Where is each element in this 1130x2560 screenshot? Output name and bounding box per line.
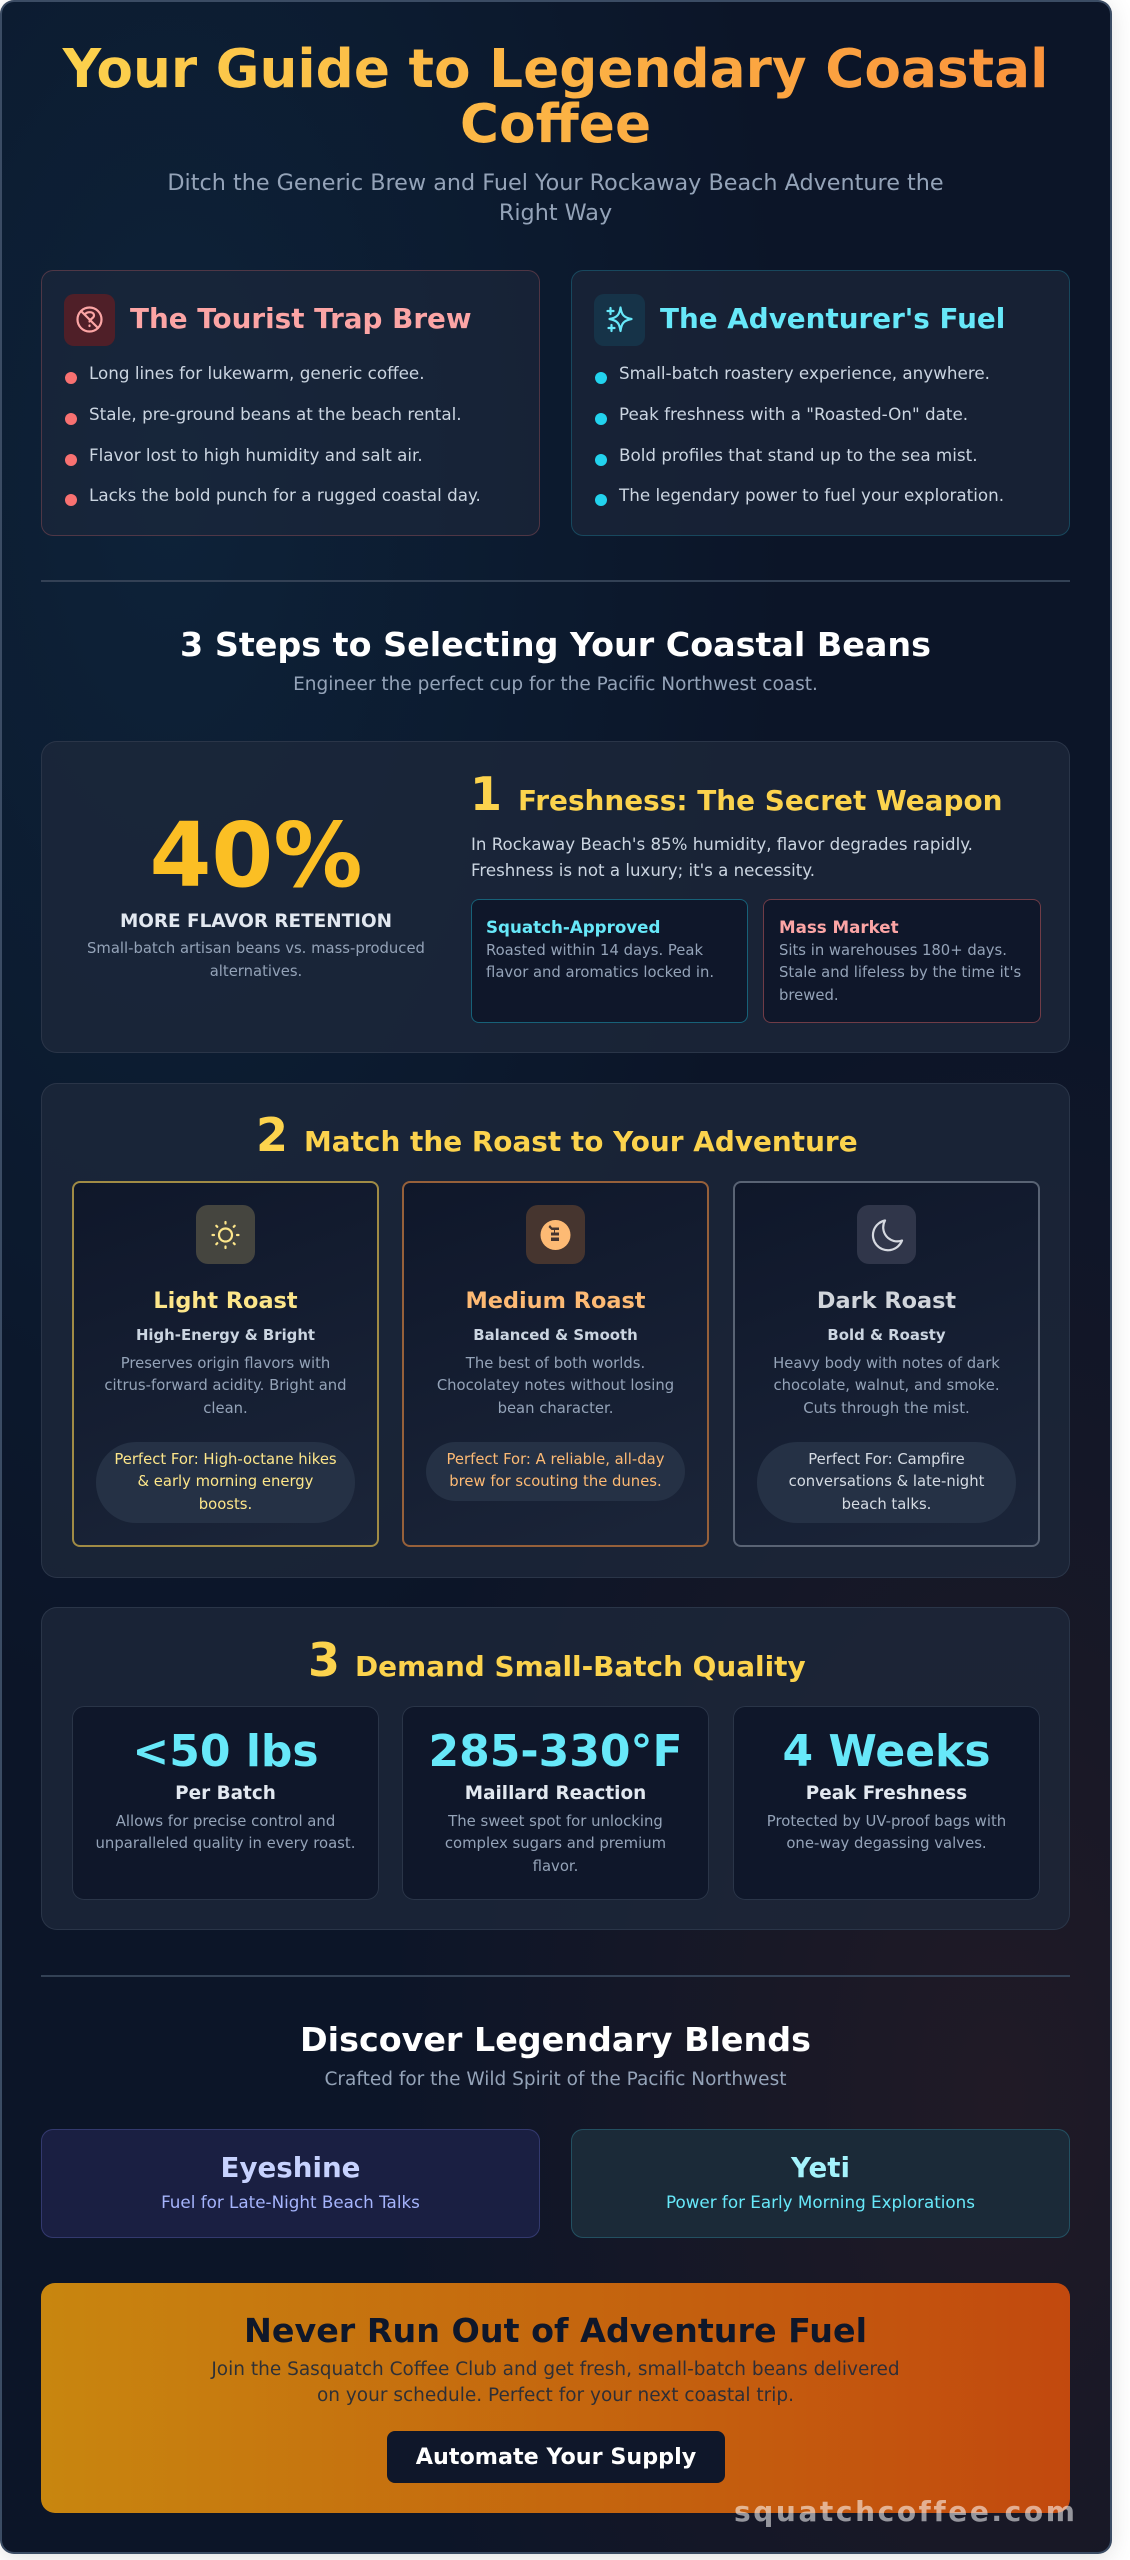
- description: Protected by UV-proof bags with: [767, 1812, 1006, 1830]
- heading: legendary blends: Discover Legendary Blends: [300, 2020, 811, 2059]
- list: tourist trap problems: Lacks the bold punch for a rugged coastal day.: [89, 485, 481, 505]
- icon: medium roast bean: [526, 1205, 585, 1264]
- roast profile: Bold & Roasty: [827, 1326, 946, 1344]
- step 1 text: Freshness is not a luxury; it's a necessity.: [471, 860, 815, 880]
- roast name: Medium Roast: [466, 1288, 646, 1314]
- roast description: Preserves origin flavors with: [121, 1355, 330, 1372]
- pill: perfect for: Perfect For: A reliable, all-day: [447, 1451, 664, 1468]
- list: adventurer benefits: [595, 363, 1004, 506]
- pill: perfect for: beach talks.: [842, 1496, 931, 1513]
- step 1 heading: Freshness: The Secret Weapon: [518, 784, 1002, 816]
- card: mass market: [763, 899, 1041, 1023]
- blend name: Yeti: [791, 2151, 850, 2184]
- roast description: chocolate, walnut, and smoke.: [773, 1377, 1000, 1394]
- stat: 40 percent: [87, 803, 425, 980]
- icon: no coffee: [64, 294, 115, 346]
- roast description: [773, 1355, 1000, 1417]
- stat card: batch size: [72, 1706, 379, 1900]
- card text: Roasted within 14 days. Peak: [486, 942, 703, 959]
- cta button: [387, 2431, 725, 2483]
- stat card: maillard reaction: [402, 1706, 709, 1900]
- card: dark roast: [733, 1181, 1040, 1547]
- card text: flavor and aromatics locked in.: [486, 964, 714, 981]
- list: adventurer benefits: Small-batch roastery experience, anywhere.: [619, 363, 990, 383]
- description: The sweet spot for unlocking: [448, 1812, 663, 1830]
- pill: perfect for: Perfect For: High-octane hikes: [114, 1451, 337, 1468]
- list: adventurer benefits: Bold profiles that stand up to the sea mist.: [619, 445, 978, 465]
- blend tagline: Power for Early Morning Explorations: [666, 2192, 975, 2212]
- label: Maillard Reaction: [465, 1783, 646, 1804]
- list: adventurer benefits: Peak freshness with a "Roasted-On" date.: [619, 404, 968, 424]
- description: complex sugars and premium: [445, 1834, 666, 1852]
- roast description: [437, 1355, 674, 1417]
- blend name: Eyeshine: [221, 2151, 360, 2184]
- subtitle: [167, 170, 944, 226]
- roast name: Dark Roast: [817, 1288, 956, 1314]
- label: Per Batch: [175, 1783, 276, 1804]
- roast description: [104, 1355, 347, 1417]
- list: adventurer benefits: The legendary power to fuel your exploration.: [619, 485, 1004, 505]
- pill: perfect for: [757, 1442, 1016, 1523]
- pill: perfect for: brew for scouting the dunes.: [449, 1473, 662, 1490]
- list: tourist trap problems: Flavor lost to high humidity and salt air.: [89, 445, 423, 465]
- list: tourist trap problems: Long lines for lukewarm, generic coffee.: [89, 363, 425, 383]
- pill: perfect for: conversations & late-night: [789, 1473, 984, 1490]
- roast description: Chocolatey notes without losing: [437, 1377, 674, 1394]
- watermark: squatchcoffee.com: [734, 2495, 1077, 2528]
- stat note: Small-batch artisan beans vs. mass-produced: [87, 940, 425, 957]
- pill: perfect for: & early morning energy: [138, 1473, 313, 1490]
- panel: the adventurer's fuel: [571, 270, 1070, 536]
- pill: perfect for: [426, 1442, 685, 1501]
- cta text: on your schedule. Perfect for your next coastal trip.: [317, 2385, 794, 2406]
- panel: step 1 freshness: [41, 741, 1070, 1053]
- roast description: citrus-forward acidity. Bright and: [104, 1377, 347, 1394]
- stat label: MORE FLAVOR RETENTION: [120, 911, 392, 932]
- description: [445, 1812, 666, 1875]
- title: Your Guide to Legendary Coastal: [63, 38, 1048, 100]
- roast name: Light Roast: [153, 1288, 298, 1314]
- card: yeti blend: [571, 2129, 1070, 2238]
- card text: Sits in warehouses 180+ days.: [779, 942, 1007, 959]
- step number 2: 2: [256, 1108, 288, 1162]
- step number 3: 3: [308, 1633, 340, 1687]
- value: <50 lbs: [132, 1726, 319, 1777]
- roast description: Heavy body with notes of dark: [773, 1355, 1000, 1372]
- value: 285-330°F: [428, 1726, 682, 1777]
- cta heading: Never Run Out of Adventure Fuel: [244, 2311, 867, 2350]
- pill: perfect for: [96, 1442, 355, 1523]
- icon: sun: [196, 1205, 255, 1264]
- pill: perfect for: Perfect For: Campfire: [808, 1451, 965, 1468]
- description: one-way degassing valves.: [786, 1834, 987, 1852]
- roast description: bean character.: [498, 1400, 613, 1417]
- card text: brewed.: [779, 987, 839, 1004]
- subheading: 3 steps: Engineer the perfect cup for the Pacific Northwest coast.: [293, 674, 818, 695]
- stat card: peak freshness: [733, 1706, 1040, 1900]
- list: tourist trap problems: Stale, pre-ground beans at the beach rental.: [89, 404, 462, 424]
- roast profile: High-Energy & Bright: [136, 1326, 315, 1344]
- description: Allows for precise control and: [116, 1812, 335, 1830]
- description: [767, 1812, 1006, 1852]
- card: medium roast: [402, 1181, 709, 1547]
- icon: moon: [857, 1205, 916, 1264]
- panel: step 2 roast: [41, 1083, 1070, 1578]
- step 2 heading: Match the Roast to Your Adventure: [304, 1124, 858, 1158]
- title: Coffee: [460, 92, 651, 154]
- heading: 3 steps: 3 Steps to Selecting Your Coastal Beans: [180, 625, 931, 664]
- subtitle: Right Way: [499, 200, 612, 226]
- step 1 text: In Rockaway Beach's 85% humidity, flavor degrades rapidly.: [471, 834, 973, 854]
- panel: call to action: [41, 2283, 1070, 2513]
- heading: The Adventurer's Fuel: [660, 302, 1005, 335]
- step 3 heading: Demand Small-Batch Quality: [355, 1650, 806, 1682]
- stat note: alternatives.: [210, 963, 302, 980]
- label: Peak Freshness: [806, 1783, 967, 1804]
- panel: the tourist trap brew: [41, 270, 540, 536]
- card title: Squatch-Approved: [486, 917, 660, 937]
- value: 4 Weeks: [782, 1726, 991, 1777]
- heading: The Tourist Trap Brew: [130, 302, 472, 335]
- card text: [779, 942, 1021, 1004]
- description: unparalleled quality in every roast.: [96, 1834, 355, 1852]
- cta text: [210, 2359, 900, 2406]
- roast description: The best of both worlds.: [466, 1355, 645, 1372]
- description: flavor.: [533, 1857, 578, 1875]
- roast description: clean.: [203, 1400, 248, 1417]
- roast description: Cuts through the mist.: [803, 1400, 970, 1417]
- card text: Stale and lifeless by the time it's: [779, 964, 1021, 981]
- stat note: [87, 940, 425, 980]
- subheading: legendary blends: Crafted for the Wild Spirit of the Pacific Northwest: [325, 2069, 786, 2090]
- cta button: Automate Your Supply: [416, 2444, 696, 2470]
- step number 1: 1: [470, 767, 502, 821]
- icon: sparkles: [594, 294, 645, 346]
- card title: Mass Market: [779, 917, 899, 937]
- card: squatch-approved: [471, 899, 748, 1023]
- blend tagline: Fuel for Late-Night Beach Talks: [161, 2192, 420, 2212]
- card: light roast: [72, 1181, 379, 1547]
- title: [40, 42, 1071, 152]
- subtitle: Ditch the Generic Brew and Fuel Your Rockaway Beach Adventure the: [167, 170, 944, 196]
- cta text: Join the Sasquatch Coffee Club and get fresh, small-batch beans delivered: [211, 2359, 900, 2380]
- card: eyeshine blend: [41, 2129, 540, 2238]
- stat value: 40%: [149, 803, 363, 907]
- panel: step 3 quality: [41, 1607, 1070, 1930]
- description: [96, 1812, 355, 1852]
- step 1 text: [471, 834, 973, 880]
- roast profile: Balanced & Smooth: [473, 1326, 638, 1344]
- pill: perfect for: boosts.: [199, 1496, 252, 1513]
- card text: [486, 942, 714, 981]
- list: tourist trap problems: [65, 363, 481, 506]
